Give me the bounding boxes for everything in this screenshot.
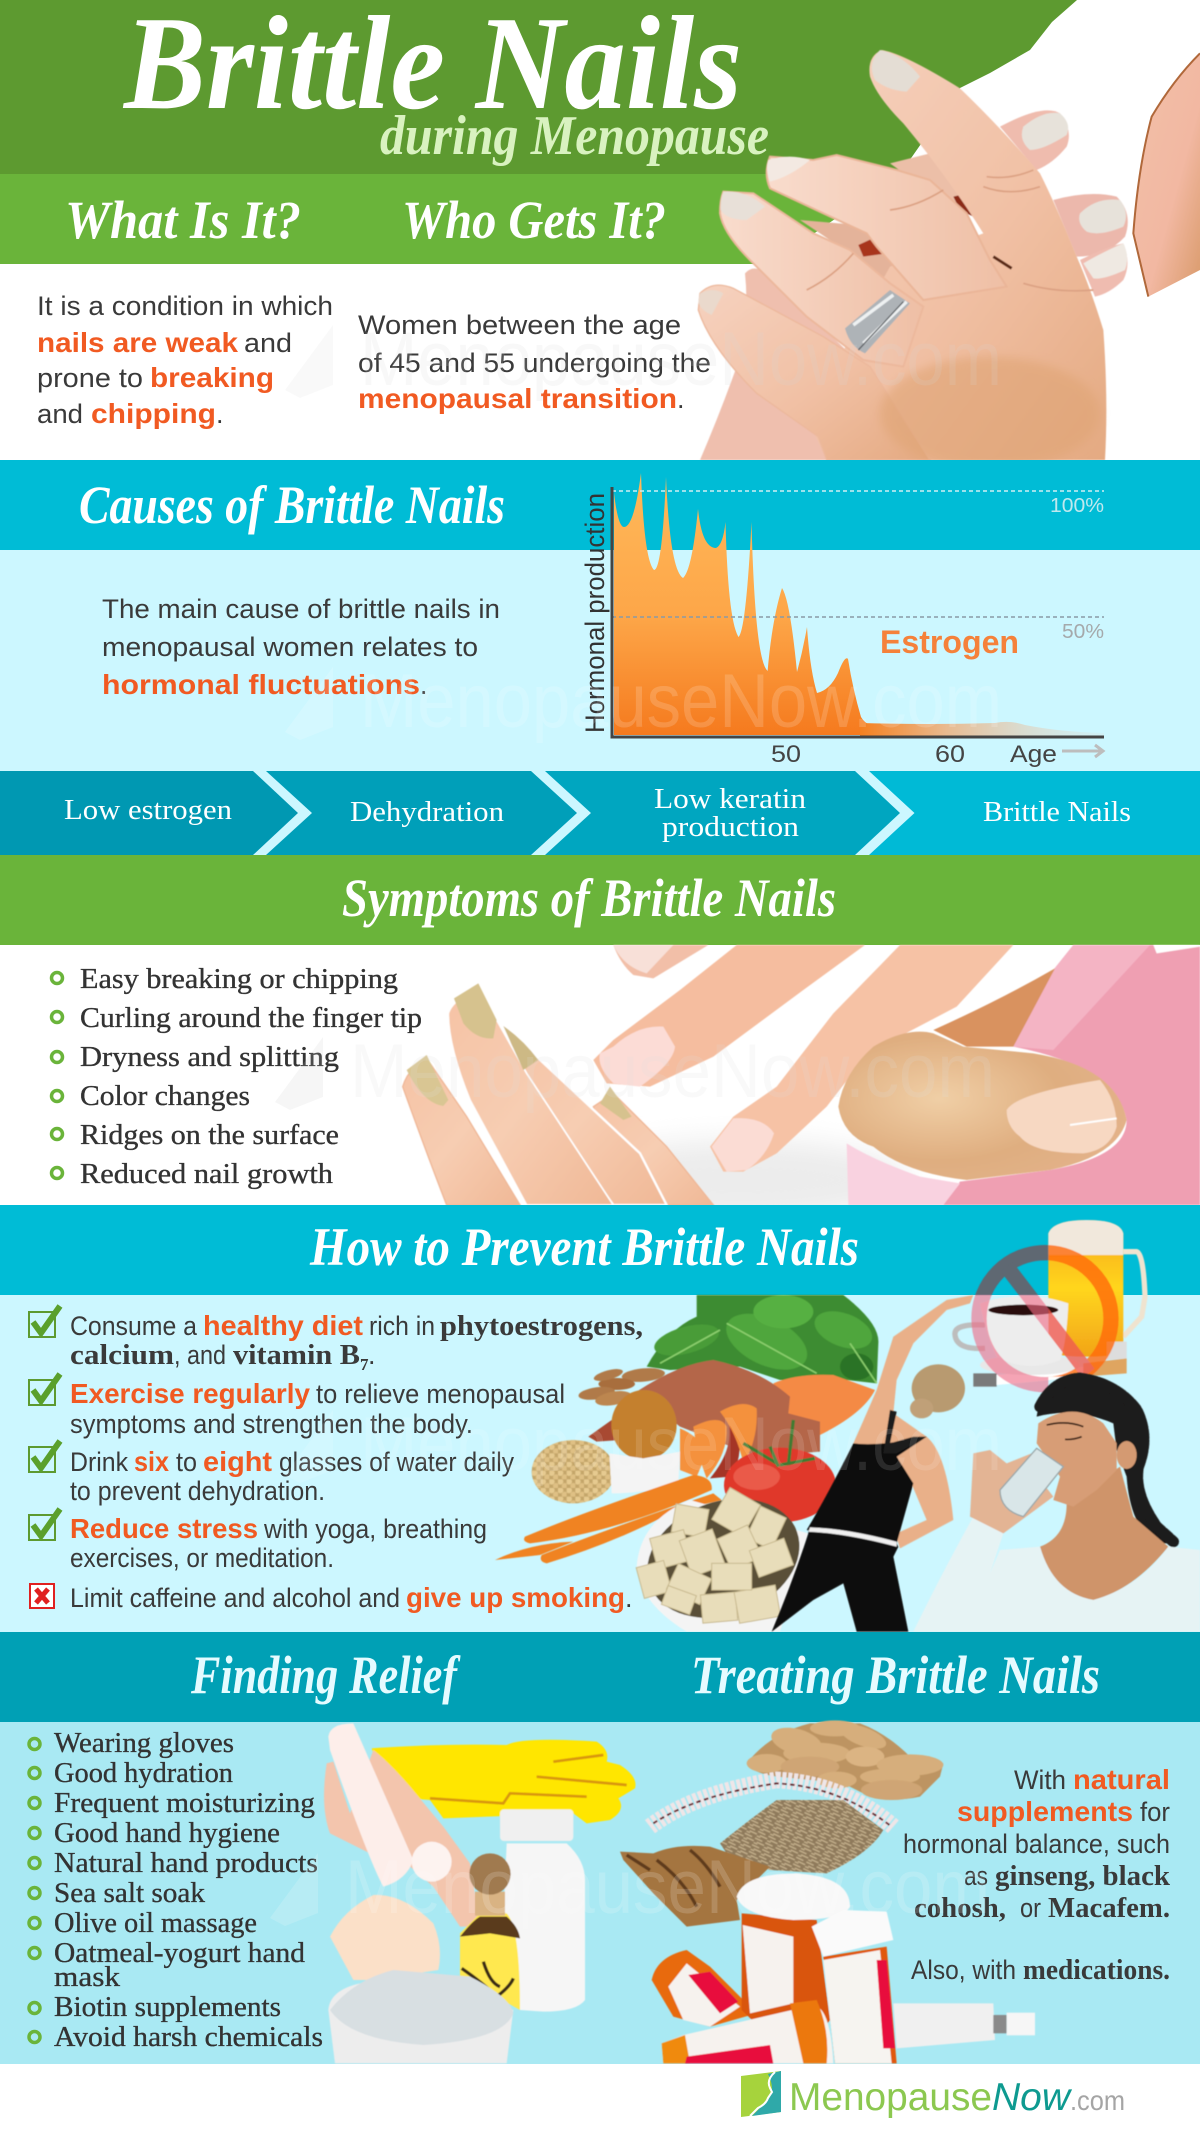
pill bottle bottom <box>662 2000 833 2063</box>
photo: hand care products <box>324 1723 636 2063</box>
watermark: MenopauseNow.com <box>345 1845 990 1930</box>
footer logo <box>0 2064 1200 2130</box>
text: who gets it: menopausal transition <box>358 383 677 414</box>
prevention list <box>29 1306 643 1613</box>
panel: causes of brittle nails <box>0 460 1200 771</box>
x axis label age: Age <box>1010 741 1057 768</box>
text: what is it: nails are weak <box>37 327 238 358</box>
icon: check <box>29 1509 60 1540</box>
tofu bowl <box>630 1478 816 1638</box>
text: what is it: chipping <box>91 398 216 429</box>
item: water: eight <box>203 1446 272 1477</box>
text: medications: medications. <box>1023 1955 1170 1986</box>
item: healthy diet: 7 <box>360 1355 369 1374</box>
yellow gloves <box>372 1740 636 1823</box>
text: what is it: . <box>216 399 224 429</box>
photo: yellowed nails fingers <box>403 945 713 1205</box>
relief list: mask <box>54 1961 121 1993</box>
symptom list: Ridges on the surface <box>80 1119 339 1151</box>
step: low keratin production <box>654 783 807 843</box>
icon: logo face <box>741 2071 781 2117</box>
x axis tick 60: 60 <box>935 741 965 768</box>
item: exercise: Exercise regularly <box>70 1378 310 1409</box>
text: main cause: menopausal women relates to <box>102 632 478 662</box>
tablets <box>747 1720 943 1800</box>
item: caffeine and smoking: . <box>625 1583 633 1613</box>
text: main cause: The main cause of brittle nails in <box>102 594 500 624</box>
item: water: to prevent dehydration. <box>70 1476 325 1506</box>
relief list: Good hand hygiene <box>54 1817 280 1849</box>
egg in cup <box>609 1390 680 1493</box>
heading: finding relief: Finding Relief <box>190 1645 461 1705</box>
text: natural supplements: Macafem. <box>1048 1893 1170 1924</box>
item: healthy diet: Consume a <box>70 1311 198 1341</box>
pill bottle left <box>652 1950 757 2027</box>
coffee cup <box>955 1296 1080 1375</box>
logo wordmark: Menopause <box>789 2076 992 2119</box>
item: exercise: symptoms and strengthen the body. <box>70 1409 473 1439</box>
pill bottle upright <box>737 1873 850 2063</box>
icon: check <box>29 1441 60 1472</box>
panel: cause chain chevrons <box>0 771 1200 855</box>
text: who gets it: of 45 and 55 undergoing the <box>358 348 711 378</box>
photo: woman drinking water <box>913 1377 1200 1632</box>
text: natural supplements: natural <box>1073 1764 1170 1795</box>
item: exercise: to relieve menopausal <box>316 1379 565 1409</box>
label 50%: 50% <box>1062 621 1104 643</box>
text: who gets it <box>358 310 711 414</box>
relief list: Sea salt soak <box>54 1877 205 1909</box>
text: main cause: . <box>420 670 428 700</box>
watermark: MenopauseNow.com <box>360 659 1002 744</box>
symptom list: Reduced nail growth <box>80 1158 334 1190</box>
relief list: Oatmeal-yogurt hand <box>54 1937 305 1969</box>
subheading green banner <box>0 174 900 264</box>
item: healthy diet: . <box>368 1340 376 1370</box>
text: natural supplements: With <box>1014 1765 1066 1795</box>
text: natural supplements: for <box>1140 1797 1170 1827</box>
almonds <box>578 1366 665 1408</box>
white bottle <box>500 1809 585 2012</box>
step: low estrogen: Low estrogen <box>64 794 233 826</box>
item: water: to <box>176 1447 197 1477</box>
panel: how to prevent <box>0 1205 1200 1638</box>
relief list: Biotin supplements <box>54 1991 281 2023</box>
hand in salt <box>330 1895 440 1980</box>
icon: no caffeine alcohol or smoking <box>955 1220 1145 1387</box>
photo: supplements and medications <box>620 1720 1035 2063</box>
logo wordmark: Now <box>992 2076 1073 2119</box>
panel: header and intro <box>0 0 1200 470</box>
photo: healthy foods <box>495 1295 878 1638</box>
logo wordmark <box>789 2076 1125 2119</box>
item: stress <box>70 1513 487 1573</box>
label estrogen: Estrogen <box>880 624 1019 660</box>
text: who gets it: Women between the age <box>358 310 681 340</box>
watermark: MenopauseNow.com <box>360 317 1002 402</box>
spinach <box>647 1295 878 1383</box>
item: healthy diet: phytoestrogens, <box>440 1311 643 1342</box>
soy beans <box>532 1440 615 1503</box>
heading: what is it: What Is It? <box>65 190 301 250</box>
text: what is it: and <box>244 328 292 358</box>
item: caffeine and smoking <box>70 1582 633 1613</box>
y axis label: Hormonal production <box>580 493 610 733</box>
x axis tick 50: 50 <box>771 741 801 768</box>
item: healthy diet <box>70 1310 643 1374</box>
symptom list: Dryness and splitting <box>80 1041 339 1073</box>
relief list: Good hydration <box>54 1757 233 1789</box>
heading: treating brittle nails: Treating Brittle Nails <box>691 1645 1100 1705</box>
text: main cause <box>102 594 500 700</box>
hand with lotion tube <box>324 1723 480 1927</box>
step: low keratin production: Low keratin <box>654 783 807 815</box>
text: natural supplements: or <box>1020 1893 1041 1923</box>
symptom list: Color changes <box>80 1080 250 1112</box>
relief list: Wearing gloves <box>54 1727 234 1759</box>
text: natural supplements: ginseng, black <box>995 1861 1170 1892</box>
salt bowl <box>328 1970 513 2063</box>
item: caffeine and smoking: give up smoking <box>406 1582 625 1613</box>
item: healthy diet: , and <box>174 1340 226 1370</box>
salmon <box>773 1375 875 1435</box>
photo: clasped hands <box>698 50 1200 470</box>
relief list: Natural hand products <box>54 1847 318 1879</box>
item: healthy diet: rich in <box>369 1311 435 1341</box>
text: what is it: breaking <box>150 362 274 393</box>
text: what is it <box>37 291 333 429</box>
heading: causes: Causes of Brittle Nails <box>79 475 505 535</box>
chart: estrogen production by age <box>580 473 1104 768</box>
subtitle: during Menopause <box>380 105 769 167</box>
pill bottle right <box>812 1910 897 2063</box>
relief list: Avoid harsh chemicals <box>54 2021 323 2053</box>
photo: woman stretching <box>772 1295 973 1632</box>
root pile <box>720 1800 883 1873</box>
text: natural supplements: as <box>964 1861 988 1891</box>
cigarette <box>973 1342 1127 1387</box>
item: caffeine and smoking: Limit caffeine and alcohol and <box>70 1583 400 1613</box>
item: stress: exercises, or meditation. <box>70 1543 334 1573</box>
text: main cause: hormonal fluctuations <box>102 669 420 700</box>
item: water: glasses of water daily <box>279 1447 514 1477</box>
watermark: MenopauseNow.com <box>350 1029 995 1114</box>
item: water: Drink <box>70 1447 128 1477</box>
photo: damaged nail fingers and thumb <box>593 945 1200 1205</box>
sweet potato <box>588 1360 820 1478</box>
label 100%: 100% <box>1050 495 1104 517</box>
tomato <box>724 1420 836 1522</box>
estrogen area <box>614 473 1104 736</box>
relief list: Frequent moisturizing <box>54 1787 315 1819</box>
item: water <box>70 1446 514 1506</box>
text: what is it: prone to <box>37 363 143 393</box>
step: low keratin production: production <box>662 811 800 843</box>
symptom list <box>52 963 422 1190</box>
item: exercise <box>70 1378 565 1439</box>
icon: cross <box>30 1584 54 1608</box>
panel: symptoms <box>0 855 1200 1220</box>
item: healthy diet: vitamin B <box>233 1340 360 1371</box>
heading: prevent: How to Prevent Brittle Nails <box>309 1217 859 1277</box>
item: stress: Reduce stress <box>70 1513 258 1544</box>
carrots <box>495 1475 722 1563</box>
text: natural supplements: cohosh, <box>914 1893 1006 1924</box>
arrow: age <box>1062 745 1103 757</box>
symptom list: Curling around the finger tip <box>80 1002 422 1034</box>
item: stress: with yoga, breathing <box>263 1514 487 1544</box>
heading: who gets it: Who Gets It? <box>402 190 666 250</box>
text: medications <box>911 1955 1170 1986</box>
item: water: six <box>134 1446 169 1477</box>
item: healthy diet: calcium <box>70 1340 174 1371</box>
heading: symptoms: Symptoms of Brittle Nails <box>342 868 836 928</box>
text: what is it: It is a condition in which <box>37 291 333 321</box>
oil bottle <box>460 1853 520 2010</box>
text: who gets it: . <box>677 384 685 414</box>
item: healthy diet: healthy diet <box>203 1310 363 1341</box>
relief list <box>29 1727 323 2053</box>
text: medications: Also, with <box>911 1955 1016 1985</box>
symptom list: Easy breaking or chipping <box>80 963 398 995</box>
watermark: MenopauseNow.com <box>360 1402 1002 1487</box>
beer mug <box>1048 1220 1145 1357</box>
text: natural supplements: hormonal balance, such <box>903 1829 1170 1859</box>
header green banner <box>0 0 1077 174</box>
step: dehydration: Dehydration <box>350 796 505 828</box>
black cohosh <box>650 1780 893 1827</box>
text: what is it: and <box>37 399 83 429</box>
icon: check <box>29 1306 60 1337</box>
ointment tube <box>893 2003 1035 2048</box>
step: brittle nails: Brittle Nails <box>983 796 1131 828</box>
text: natural supplements <box>903 1764 1170 1924</box>
text: natural supplements: supplements <box>957 1796 1133 1827</box>
ginseng root <box>620 1846 770 1927</box>
no symbol <box>979 1253 1111 1385</box>
panel: finding relief and treating <box>0 1632 1200 2064</box>
logo wordmark: .com <box>1070 2085 1125 2116</box>
relief list: Olive oil massage <box>54 1907 257 1939</box>
icon: check <box>29 1374 60 1405</box>
